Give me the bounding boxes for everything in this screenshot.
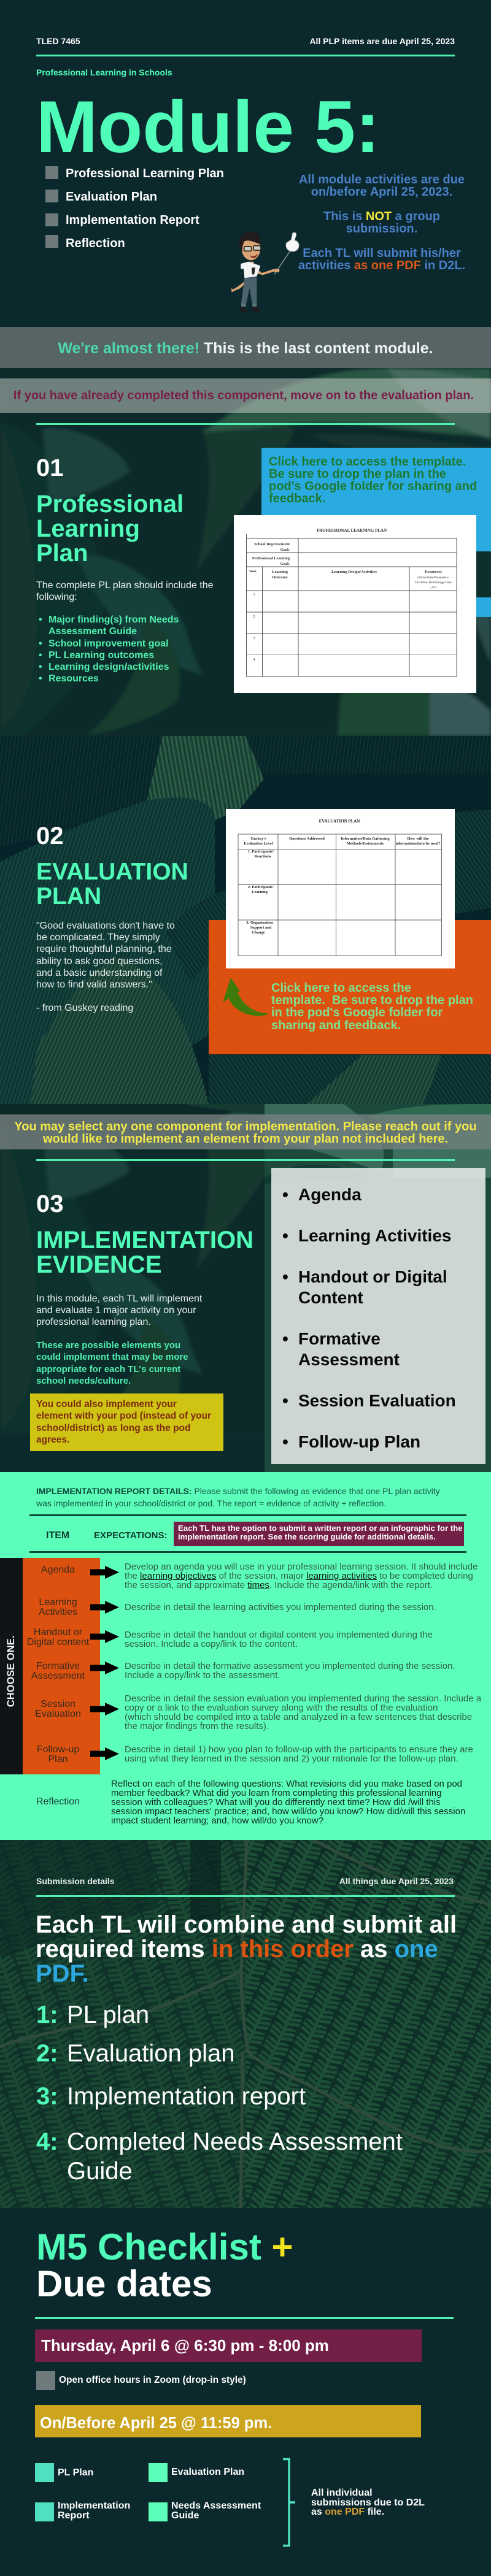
panel: 01 professional learning plan xyxy=(36,454,213,684)
background: leaf photo section behind implementation evidence xyxy=(1,1104,491,1472)
quote: require thoughtful planning, the xyxy=(36,944,172,954)
icon: gray square xyxy=(36,2371,55,2390)
green note: school needs/culture. xyxy=(36,1376,131,1386)
description: session. Include a copy/link to the content. xyxy=(125,1639,298,1649)
image: evaluation plan template: Support and xyxy=(250,926,272,930)
image: professional learning plan template: 1 xyxy=(253,593,255,597)
yellow note text: You could also implement your xyxy=(36,1399,177,1409)
due note: All PLP items are due April 25, 2023 xyxy=(309,36,455,46)
panel: implementation report details xyxy=(0,1472,491,1840)
item: implementation report: Implementation Report xyxy=(66,213,199,227)
quote: "Good evaluations don't have to xyxy=(36,921,175,931)
callout text: Be sure to drop the plan in the xyxy=(269,467,446,481)
intro text: IMPLEMENTATION REPORT DETAILS: Please submit the following as evidence that one PL plan activity xyxy=(36,1486,440,1496)
module due date note: activities as one PDF in D2L. xyxy=(298,259,465,272)
label: Activities xyxy=(39,1607,77,1617)
date banner: final due date xyxy=(35,2405,421,2437)
image: evaluation plan template xyxy=(226,809,455,968)
image: evaluation plan template: How will the xyxy=(407,837,429,841)
image: professional learning plan template: Professional Learning xyxy=(252,556,290,561)
image: professional learning plan template: School Improvement xyxy=(254,542,290,546)
green note: could implement that may be more xyxy=(36,1352,188,1362)
background: fern photo section xyxy=(0,1840,491,2208)
heading xyxy=(36,491,184,567)
list items: • xyxy=(282,1329,288,1348)
banner text: On/Before April 25 @ 11:59 pm. xyxy=(40,2415,272,2432)
list items: • xyxy=(282,1432,288,1451)
description xyxy=(111,1779,465,1825)
subtitle: Professional Learning in Schools xyxy=(36,67,172,77)
callout text: Click here to access the xyxy=(271,981,411,995)
image: professional learning plan template: PROFESSIONAL LEARNING PLAN xyxy=(317,528,387,533)
table header rule xyxy=(29,1514,466,1516)
due note: All things due April 25, 2023 xyxy=(339,1876,454,1886)
callout text xyxy=(271,981,473,1032)
description: session impact teachers' practice; and, how will/do you know? How did/will this session xyxy=(111,1806,465,1817)
section divider xyxy=(36,1159,455,1161)
image: evaluation plan template: Change xyxy=(252,930,265,935)
callout: blue template link xyxy=(261,448,491,617)
bullet list: Major finding(s) from Needs xyxy=(48,615,179,625)
intro text: In this module, each TL will implement xyxy=(36,1294,202,1304)
image: evaluation plan template: information/data be used? xyxy=(396,841,440,846)
item: evaluation plan xyxy=(149,2463,247,2482)
header row xyxy=(36,36,455,46)
submission note: submissions due to D2L xyxy=(311,2497,425,2507)
list items: • xyxy=(282,1226,288,1245)
item: pl plan xyxy=(35,2463,109,2482)
list items: Content xyxy=(298,1288,363,1307)
label: Session xyxy=(41,1699,75,1709)
label xyxy=(23,1628,93,1647)
bullet list xyxy=(39,615,179,684)
quote: be complicated. They simply xyxy=(36,932,160,943)
module due date note: submission. xyxy=(346,222,417,236)
expectations heading: EXPECTATIONS: xyxy=(94,1530,167,1541)
arrow: points up to the template xyxy=(223,978,268,1016)
bullet list: Assessment Guide xyxy=(48,626,137,637)
bullet list: Learning design/activities xyxy=(48,662,169,672)
image: professional learning plan template: 3 xyxy=(253,637,255,640)
heading: Each TL will combine and submit all xyxy=(36,1911,457,1938)
banner text: Thursday, April 6 @ 6:30 pm - 8:00 pm xyxy=(41,2336,329,2355)
band: already completed note xyxy=(0,378,491,413)
item: needs assessment guide xyxy=(149,2502,259,2521)
green note: appropriate for each TL's current xyxy=(36,1364,180,1374)
number: 03 xyxy=(36,1190,64,1217)
module due date note: This is NOT a group xyxy=(323,210,440,223)
intro text xyxy=(36,1486,440,1508)
green note: These are possible elements you xyxy=(36,1340,180,1351)
item: reflection: Reflection xyxy=(66,237,125,250)
quote: - from Guskey reading xyxy=(36,1003,133,1013)
image: professional learning plan template: 2 xyxy=(253,615,255,619)
image: evaluation plan template: Methods/Instruments xyxy=(347,841,384,846)
course code: TLED 7465 xyxy=(36,36,80,46)
image: professional learning plan template: (Time/Subs/Presenters/ xyxy=(417,575,449,580)
quote: and a basic understanding of xyxy=(36,968,162,978)
label: Evaluation xyxy=(35,1709,81,1719)
intro text xyxy=(36,1294,203,1327)
list items: • xyxy=(282,1391,288,1410)
image: professional learning plan template: Facilities/Technology/Data xyxy=(415,581,452,585)
item: implementation report xyxy=(35,2502,133,2521)
item 4: 4: xyxy=(36,2128,58,2155)
yellow note text: element with your pod (instead of your xyxy=(36,1411,211,1421)
description: Describe in detail 1) how you plan to follow-up with the participants to ensure they are xyxy=(125,1744,473,1755)
list items: • xyxy=(282,1185,288,1204)
yellow note text: agrees. xyxy=(36,1435,69,1445)
background: large leaf photo section xyxy=(1,368,491,736)
heading: EVIDENCE xyxy=(36,1251,162,1278)
description: member feedback? What did you learn from completing this professional learning xyxy=(111,1788,442,1798)
heading: required items in this order as one xyxy=(36,1936,438,1963)
item 2: 2: xyxy=(36,2040,58,2067)
description: the session, and approximate times. Include the agenda/link with the report. xyxy=(125,1580,433,1590)
module item list xyxy=(45,166,224,250)
row: learning activities xyxy=(39,1597,436,1617)
intro text xyxy=(36,580,213,602)
item: implementation report: Report xyxy=(58,2510,90,2521)
panel: submission details: PL plan xyxy=(67,2001,149,2028)
panel: 02 evaluation plan xyxy=(36,822,188,1013)
number: 02 xyxy=(36,822,64,849)
heading: PLAN xyxy=(36,883,101,910)
item 1: 1: xyxy=(36,2001,58,2028)
panel: submission details xyxy=(36,1876,455,2188)
image: evaluation plan template: Reactions xyxy=(254,854,271,859)
row: formative assessment xyxy=(23,1662,483,1686)
yellow note xyxy=(30,1393,223,1451)
arrow xyxy=(90,1747,119,1760)
module due date note xyxy=(298,173,465,272)
label: Plan xyxy=(48,1754,68,1765)
description: Reflect on each of the following questions: What revisions did you make based on pod xyxy=(111,1779,462,1789)
image: evaluation plan template: Questions Addressed xyxy=(289,837,325,841)
image: professional learning plan template: Learning xyxy=(272,570,288,574)
callout: orange template link xyxy=(209,920,491,1054)
description: Describe in detail the session evaluation you implemented during the session. Include a xyxy=(125,1693,481,1704)
label: Digital content xyxy=(27,1637,89,1647)
band text: You may select any one component for implementation. Please reach out if you xyxy=(14,1120,477,1133)
description: Describe in detail the formative assessment you implemented during the session. xyxy=(125,1661,455,1671)
image: evaluation plan template: 3. Organization xyxy=(246,921,273,925)
arrow xyxy=(90,1703,119,1715)
image: evaluation plan template: EVALUATION PLAN xyxy=(319,819,360,824)
banner text: We're almost there! This is the last content module. xyxy=(58,340,433,357)
row: agenda xyxy=(41,1562,477,1590)
callout text: template. Be sure to drop the plan xyxy=(271,994,473,1007)
label: Assessment xyxy=(31,1671,85,1681)
choose one bar xyxy=(0,1558,23,1774)
row: follow-up plan xyxy=(23,1745,483,1769)
green note xyxy=(36,1340,188,1386)
background: dark header section xyxy=(0,0,491,368)
panel: 03 implementation evidence xyxy=(30,1190,253,1451)
description: copy or a link to the evaluation survey along with the results of the evaluation xyxy=(125,1703,438,1713)
image: evaluation plan template: 2. Participants' xyxy=(248,885,274,889)
heading: Learning xyxy=(36,515,140,542)
background: palm frond photo section xyxy=(0,736,491,1104)
callout edge gap xyxy=(476,551,491,597)
choose one label: CHOOSE ONE. xyxy=(6,1636,17,1707)
panel: submission details: Guide xyxy=(67,2158,133,2185)
description: using what they learned in the session and 2) your rationale for the follow-up plan. xyxy=(125,1754,458,1764)
description: Describe in detail the handout or digital content you implemented during the xyxy=(125,1630,433,1640)
image: professional learning plan template: Learning Design/Activities xyxy=(331,570,377,574)
module due date note: All module activities are due xyxy=(299,173,465,186)
panel: possible elements list xyxy=(271,1168,485,1464)
panel: submission details: Completed Needs Assessment xyxy=(67,2128,403,2155)
bullet list: PL Learning outcomes xyxy=(48,650,154,661)
note text: Each TL has the option to submit a written report or an infographic for the xyxy=(178,1524,463,1533)
label: Formative xyxy=(36,1661,80,1671)
label: Handout or xyxy=(34,1627,82,1638)
background: dark checklist section xyxy=(0,2208,491,2576)
image: evaluation plan template: Information/Data Gathering xyxy=(341,837,390,841)
checklist heading xyxy=(36,2229,293,2302)
band: select any one component xyxy=(0,1114,491,1149)
item: evaluation plan: Evaluation Plan xyxy=(171,2467,244,2477)
bullet list: School improvement goal xyxy=(48,638,169,649)
band text: would like to implement an element from your plan not included here. xyxy=(43,1132,448,1146)
arrow xyxy=(90,1566,119,1579)
arrow xyxy=(90,1662,119,1674)
description xyxy=(125,1745,473,1763)
checklist heading: Due dates xyxy=(36,2263,212,2304)
checklist divider xyxy=(35,2317,454,2319)
list items xyxy=(282,1185,456,1451)
list items: Session Evaluation xyxy=(298,1391,456,1410)
description xyxy=(125,1662,455,1680)
yellow note text: school/district) as long as the pod xyxy=(36,1423,190,1433)
note text: Open office hours in Zoom (drop-in style) xyxy=(59,2375,246,2385)
image: evaluation plan template: Evaluation Level xyxy=(244,841,273,846)
arrow xyxy=(90,1630,119,1643)
item: needs assessment guide: Needs Assessment xyxy=(171,2501,261,2511)
list items: Follow-up Plan xyxy=(298,1432,420,1451)
description: (which should be compiled into a table and analyzed in a few sentences that describe xyxy=(125,1712,472,1722)
list items: Assessment xyxy=(298,1350,400,1369)
intro text: The complete PL plan should include the xyxy=(36,580,213,591)
checklist items xyxy=(35,2463,268,2521)
arrow xyxy=(90,1601,119,1614)
number: 01 xyxy=(36,454,64,481)
heading: Plan xyxy=(36,540,88,567)
list items: • xyxy=(282,1267,288,1286)
item: evaluation plan: Evaluation Plan xyxy=(66,190,157,204)
description xyxy=(125,1562,477,1590)
submission option note xyxy=(174,1522,464,1546)
note text xyxy=(178,1524,463,1541)
image: professional learning plan template: 4 xyxy=(253,658,255,662)
bracket xyxy=(282,2458,297,2547)
description: the learning objectives of the session, major learning activities to be completed during xyxy=(125,1571,473,1581)
description xyxy=(125,1630,433,1649)
item: implementation report: Implementation xyxy=(58,2501,130,2511)
panel: submission details: Evaluation plan xyxy=(67,2040,235,2067)
band text xyxy=(14,1120,477,1146)
image: professional learning plan template: , etc) xyxy=(430,585,437,589)
list items: Learning Activities xyxy=(298,1226,451,1245)
office hours note xyxy=(36,2371,248,2390)
item column xyxy=(23,1558,100,1774)
heading: EVALUATION xyxy=(36,859,188,885)
callout text: sharing and feedback. xyxy=(271,1019,401,1032)
item: needs assessment guide: Guide xyxy=(171,2510,199,2521)
intro text: was implemented in your school/district or pod. The report = evidence of activity + reflection. xyxy=(36,1498,386,1508)
item 3: 3: xyxy=(36,2083,58,2110)
bullet list: • xyxy=(39,650,42,661)
description: Describe in detail the learning activities you implemented during the session. xyxy=(125,1602,436,1612)
heading: Professional xyxy=(36,491,184,518)
image: evaluation plan template: Guskey's xyxy=(250,837,266,841)
bullet list: Resources xyxy=(48,673,99,684)
row: reflection xyxy=(23,1779,483,1828)
callout text: pod's Google folder for sharing and xyxy=(269,480,477,493)
image: professional learning plan template: Resources xyxy=(425,570,442,574)
list items: Agenda xyxy=(298,1185,361,1204)
image: professional learning plan template: Outcome xyxy=(272,575,288,580)
image: evaluation plan template: 1. Participants' xyxy=(248,849,274,854)
note text: implementation report. See the scoring guide for additional details. xyxy=(178,1532,436,1541)
item: pl plan: PL Plan xyxy=(58,2467,93,2478)
intro text: following: xyxy=(36,592,77,602)
section divider xyxy=(36,423,455,425)
heading xyxy=(36,859,188,910)
bullet list: • xyxy=(39,673,42,684)
icon: avatar with pointer xyxy=(231,232,300,313)
row: handout or digital content xyxy=(27,1627,433,1649)
module due date note: Each TL will submit his/her xyxy=(303,247,461,260)
checklist heading: M5 Checklist + xyxy=(36,2226,293,2267)
description: session with colleagues? What will you do differently next time? How did /will this xyxy=(111,1797,441,1807)
table header lower rule xyxy=(29,1551,466,1553)
heading: IMPLEMENTATION xyxy=(36,1227,253,1254)
row: session evaluation xyxy=(23,1694,483,1732)
callout text: Click here to access the template. xyxy=(269,455,466,469)
description xyxy=(125,1694,481,1731)
yellow note text xyxy=(36,1399,211,1445)
item: reflection xyxy=(45,235,125,250)
bullet list: • xyxy=(39,638,42,649)
date banner: office hours xyxy=(35,2329,422,2362)
image: professional learning plan template: Week xyxy=(249,570,257,573)
quote: ability to ask good questions, xyxy=(36,956,162,967)
submission note: as one PDF file. xyxy=(311,2507,384,2517)
label xyxy=(39,1597,77,1617)
quote: how to find valid answers." xyxy=(36,979,152,990)
label xyxy=(23,1662,93,1681)
heading xyxy=(36,1227,253,1278)
description: Include a copy/link to the assessment. xyxy=(125,1670,280,1681)
heading: PDF. xyxy=(36,1960,89,1987)
image: professional learning plan template xyxy=(234,515,476,693)
band: almost there xyxy=(0,327,491,368)
label: Agenda xyxy=(41,1565,75,1575)
bullet list: • xyxy=(39,662,42,672)
label: Learning xyxy=(39,1597,77,1608)
heading xyxy=(36,1912,457,1986)
module due date note: on/before April 25, 2023. xyxy=(311,185,452,199)
description: Develop an agenda you will use in your professional learning session. It should include xyxy=(125,1562,477,1572)
list items: Formative xyxy=(298,1329,381,1348)
submission note: All individual xyxy=(311,2488,373,2498)
callout text xyxy=(269,455,477,505)
intro text: and evaluate 1 major activity on your xyxy=(36,1305,196,1316)
image: professional learning plan template: Goal: xyxy=(280,562,290,566)
item heading: ITEM xyxy=(46,1530,69,1541)
quote xyxy=(36,921,175,1013)
panel: submission details: Implementation report xyxy=(67,2083,306,2110)
main title: Module 5: xyxy=(36,86,380,168)
divider xyxy=(36,1895,455,1897)
image: evaluation plan template: Learning xyxy=(252,890,268,894)
item: professional learning plan: Professional Learning Plan xyxy=(66,167,224,180)
note text: If you have already completed this component, move on to the evaluation plan. xyxy=(14,389,474,402)
label: Reflection xyxy=(36,1796,80,1807)
bullet list: • xyxy=(39,615,42,625)
list items: Handout or Digital xyxy=(298,1267,447,1286)
image: professional learning plan template: Goal: xyxy=(280,548,290,552)
label xyxy=(23,1745,93,1765)
label xyxy=(23,1700,93,1719)
label: Follow-up xyxy=(37,1744,79,1755)
intro text: professional learning plan. xyxy=(36,1317,151,1327)
section label: Submission details xyxy=(36,1876,115,1886)
header divider xyxy=(36,55,455,56)
callout text: in the pod's Google folder for xyxy=(271,1006,443,1019)
description: impact student learning; and, how will/do you know? xyxy=(111,1815,323,1826)
submission note xyxy=(311,2488,425,2517)
description: the major findings from the results). xyxy=(125,1721,269,1731)
callout text: feedback. xyxy=(269,492,325,505)
